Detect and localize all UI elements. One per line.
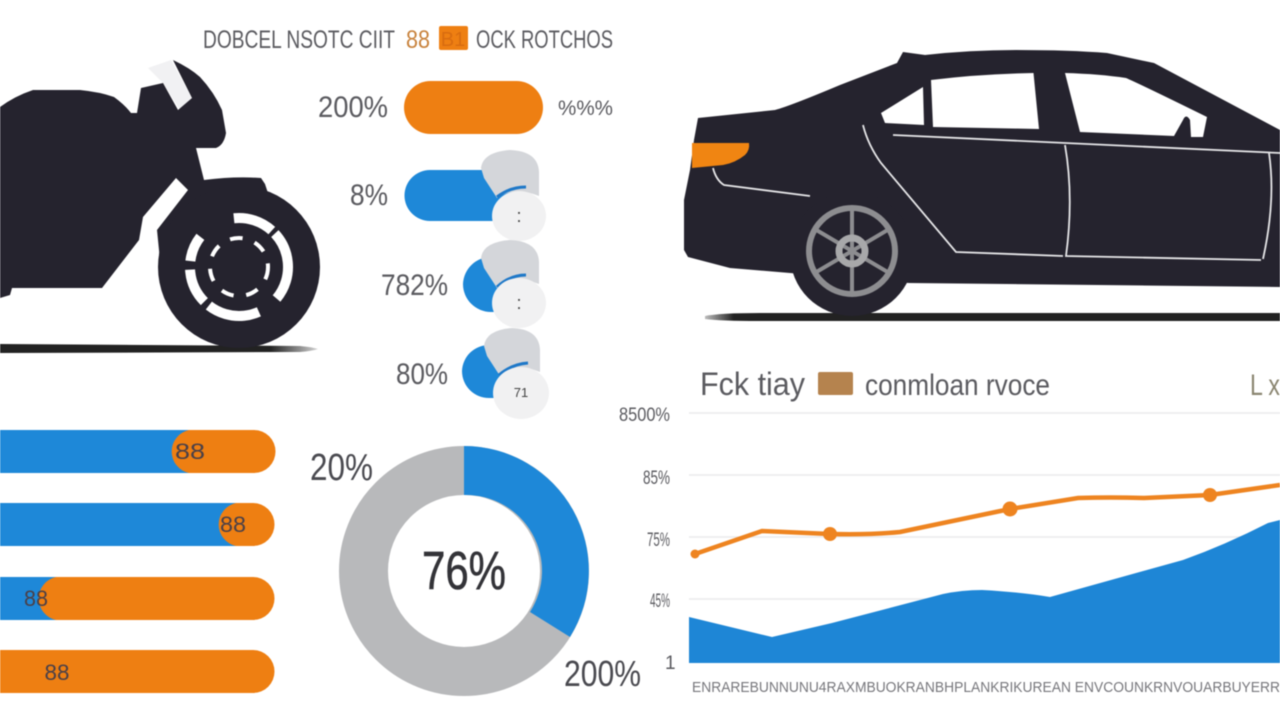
header legend: OCK ROTCHOS <box>476 26 613 54</box>
icon: car silhouette <box>684 50 1280 321</box>
stacked bar 3 <box>0 577 274 620</box>
car wheel rim <box>809 206 895 296</box>
chart y axis labels: 8500% <box>619 405 670 426</box>
bar row: 80% blue pill with toggle <box>396 328 549 419</box>
bar row: 8% blue pill with toggle <box>350 150 546 241</box>
chart y axis labels <box>619 405 676 674</box>
stacked bar 1: 88 <box>175 439 205 464</box>
donut chart <box>310 446 641 694</box>
donut chart: 20% <box>310 447 373 489</box>
header legend: 88 <box>406 26 430 54</box>
line chart title: conmloan rvoce <box>865 369 1050 402</box>
bar row: 200% orange pill: 200% <box>318 91 388 124</box>
chart y axis labels: 1 <box>665 653 676 674</box>
car body lines <box>713 125 1280 260</box>
bar row: 782% blue pill with toggle: : <box>516 293 522 313</box>
header legend <box>203 26 613 54</box>
stacked bars <box>0 430 276 693</box>
icon: motorcycle silhouette <box>0 60 320 353</box>
chart y axis labels: 85% <box>643 468 670 489</box>
stacked bar 4: 88 <box>44 660 70 685</box>
bar row: 80% blue pill with toggle: 71 <box>514 385 528 400</box>
stacked bar 3: 88 <box>24 586 48 611</box>
bar row: 200% orange pill <box>318 81 613 134</box>
taillight <box>692 143 749 168</box>
line chart title: Fck tiay <box>700 366 805 402</box>
bar row: 200% orange pill: %%% <box>558 97 613 120</box>
stacked bar 2 <box>0 503 274 546</box>
bar row: 80% blue pill with toggle: 80% <box>396 358 448 391</box>
donut chart: 76% <box>422 541 506 601</box>
line chart title <box>700 366 1280 402</box>
chart y axis labels: 45% <box>650 591 670 612</box>
stacked bar 2: 88 <box>220 512 246 537</box>
chart y axis labels: 75% <box>647 530 670 551</box>
orange line series <box>695 485 1280 554</box>
stacked bar 1 <box>0 430 276 473</box>
area and line chart <box>619 405 1280 696</box>
header legend: DOBCEL NSOTC CIIT <box>203 26 395 54</box>
stacked bar 4 <box>0 650 274 693</box>
car windows <box>881 73 1207 137</box>
orange line markers <box>690 488 1217 558</box>
bar row: 782% blue pill with toggle <box>381 240 546 328</box>
blue area series <box>689 520 1280 663</box>
bar row: 8% blue pill with toggle: 8% <box>350 179 388 212</box>
bar row: 8% blue pill with toggle: : <box>516 206 522 226</box>
donut chart: 200% <box>564 653 641 694</box>
bar row: 782% blue pill with toggle: 782% <box>381 269 448 302</box>
header legend: B1 <box>441 29 465 51</box>
